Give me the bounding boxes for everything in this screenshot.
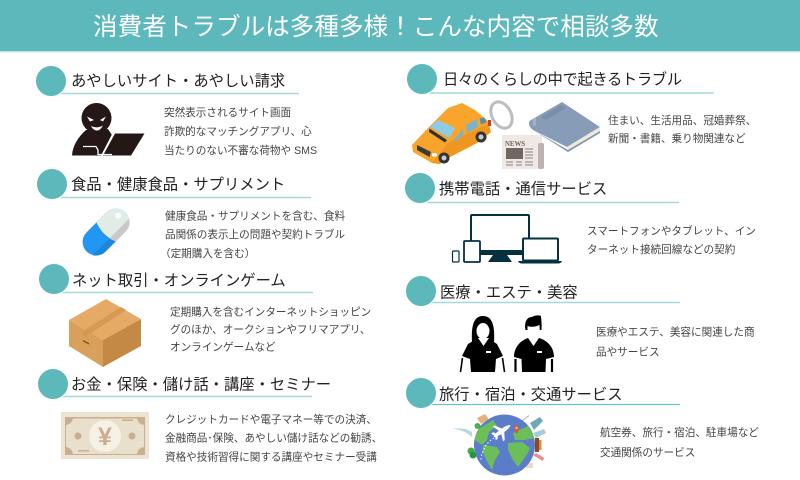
icon: newspaper — [502, 135, 544, 169]
heading: travel — [406, 378, 680, 408]
text: telecoms — [587, 224, 756, 256]
icon: globe with plane and landmarks — [453, 414, 546, 476]
yen sign: ¥ — [98, 423, 112, 451]
icon: orange car — [412, 103, 491, 164]
text: medical: 品やサービス — [596, 346, 660, 358]
icon: yen banknote — [61, 412, 149, 459]
title: 消費者トラブルは多種多様！こんな内容で相談多数 — [93, 13, 659, 41]
text: suspicious sites: 詐欺的なマッチングアプリ、心 — [164, 125, 312, 138]
text: daily life — [608, 114, 756, 145]
icon: book — [529, 102, 600, 152]
icon: capsule — [77, 203, 135, 261]
text: medical: 医療やエステ、美容に関連した商 — [596, 326, 755, 338]
panel: online trade and games — [38, 264, 371, 367]
heading: telecoms: 携帯電話・通信サービス — [439, 181, 607, 198]
panel: suspicious sites and billing — [36, 66, 317, 157]
panel: travel and transport — [406, 378, 759, 476]
heading: travel: 旅行・宿泊・交通サービス — [439, 386, 623, 404]
heading: medical: 医療・エステ・美容 — [440, 284, 578, 302]
text: food: 品関係の表示上の問題や契約トラブル — [165, 228, 345, 241]
panel: money and insurance — [38, 368, 382, 464]
heading: money: お金・保険・儲け話・講座・セミナー — [71, 376, 331, 394]
heading: food: 食品・健康食品・サプリメント — [71, 176, 285, 194]
text: daily life: 新聞・書籍、乗り物関連など — [608, 132, 746, 145]
icon: female and male clinicians — [460, 315, 554, 372]
icon: monitor, tablet, phone, laptop — [452, 215, 562, 264]
heading: food — [36, 168, 311, 200]
heading: money — [38, 368, 331, 400]
text: travel: 航空券、旅行・宿泊、駐車場など — [600, 426, 759, 439]
text: money — [165, 413, 382, 464]
heading: online trade: ネット取引・オンラインゲーム — [72, 272, 286, 290]
heading: suspicious sites — [36, 66, 299, 96]
text: travel — [600, 426, 759, 459]
text: suspicious sites: 突然表示されるサイト画面 — [164, 106, 291, 119]
icon: hooded figure at laptop — [72, 103, 144, 156]
heading: medical — [406, 276, 680, 306]
text: telecoms: スマートフォンやタブレット、イン — [587, 224, 756, 238]
text: money: 資格や技術習得に関する講座やセミナー受講 — [165, 450, 377, 464]
text: online trade: オンラインゲームなど — [170, 342, 276, 354]
icon: cardboard box — [69, 299, 141, 367]
text: online trade — [170, 306, 371, 354]
icon: ring — [487, 98, 516, 132]
text: food: （定期購入を含む） — [160, 247, 255, 260]
text: suspicious sites — [164, 106, 317, 157]
text: telecoms: ターネット接続回線などの契約 — [587, 243, 735, 256]
text: money: 金融商品･保険、あやしい儲け話などの勧誘、 — [165, 432, 382, 444]
text: medical — [596, 326, 755, 358]
panel: medical and beauty — [406, 276, 755, 372]
panel: mobile and telecoms — [404, 172, 756, 264]
text: food — [160, 210, 345, 260]
heading: online trade — [38, 264, 313, 294]
heading: daily life: 日々のくらしの中で起きるトラブル — [443, 70, 682, 88]
text: online trade: 定期購入を含むインターネットショッピン — [170, 306, 371, 318]
header banner — [0, 0, 800, 52]
heading: suspicious sites: あやしいサイト・あやしい請求 — [71, 73, 285, 90]
text: travel: 交通関係のサービス — [600, 446, 695, 459]
text: daily life: 住まい、生活用品、冠婚葬祭、 — [608, 114, 756, 127]
icon: newspaper: NEWS — [505, 141, 525, 148]
heading: telecoms — [404, 172, 679, 204]
heading: daily life — [406, 64, 714, 94]
panel: food and supplements — [36, 168, 345, 261]
text: food: 健康食品・サプリメントを含む、食料 — [165, 210, 345, 222]
text: online trade: グのほか、オークションやフリマアプリ、 — [170, 323, 370, 336]
text: suspicious sites: 当たりのない不審な荷物や SMS — [164, 144, 317, 157]
panel: daily life trouble — [406, 64, 756, 169]
text: money: クレジットカードや電子マネー等での決済、 — [165, 413, 377, 426]
